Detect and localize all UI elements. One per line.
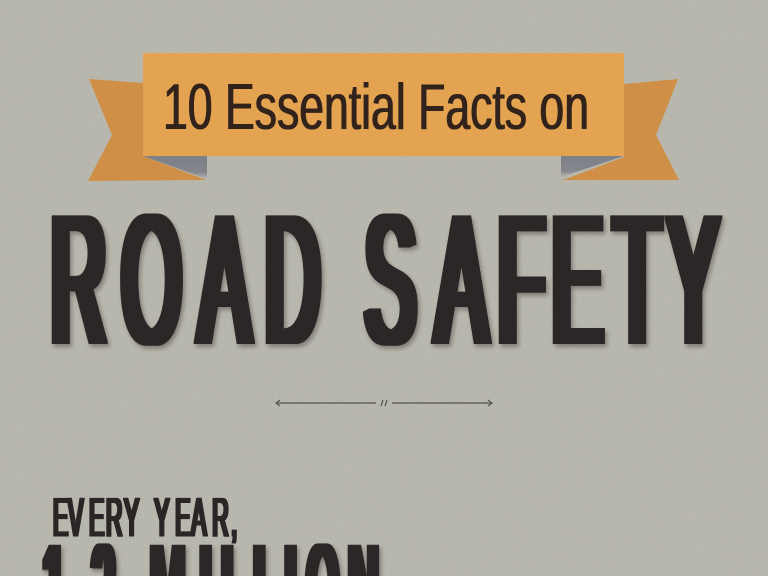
ribbon banner: [88, 53, 679, 181]
banner heading: 10 Essential Facts on: [163, 70, 589, 143]
main title: ROAD SAFETY: [51, 177, 719, 382]
divider arrow: [276, 400, 492, 406]
left ribbon tail: [88, 79, 206, 181]
fact intro text: EVERY YEAR,: [53, 486, 237, 548]
left ribbon fold: [143, 156, 207, 179]
right ribbon tail: [563, 79, 679, 180]
ribbon front panel: [143, 53, 624, 156]
right ribbon fold: [561, 156, 624, 177]
